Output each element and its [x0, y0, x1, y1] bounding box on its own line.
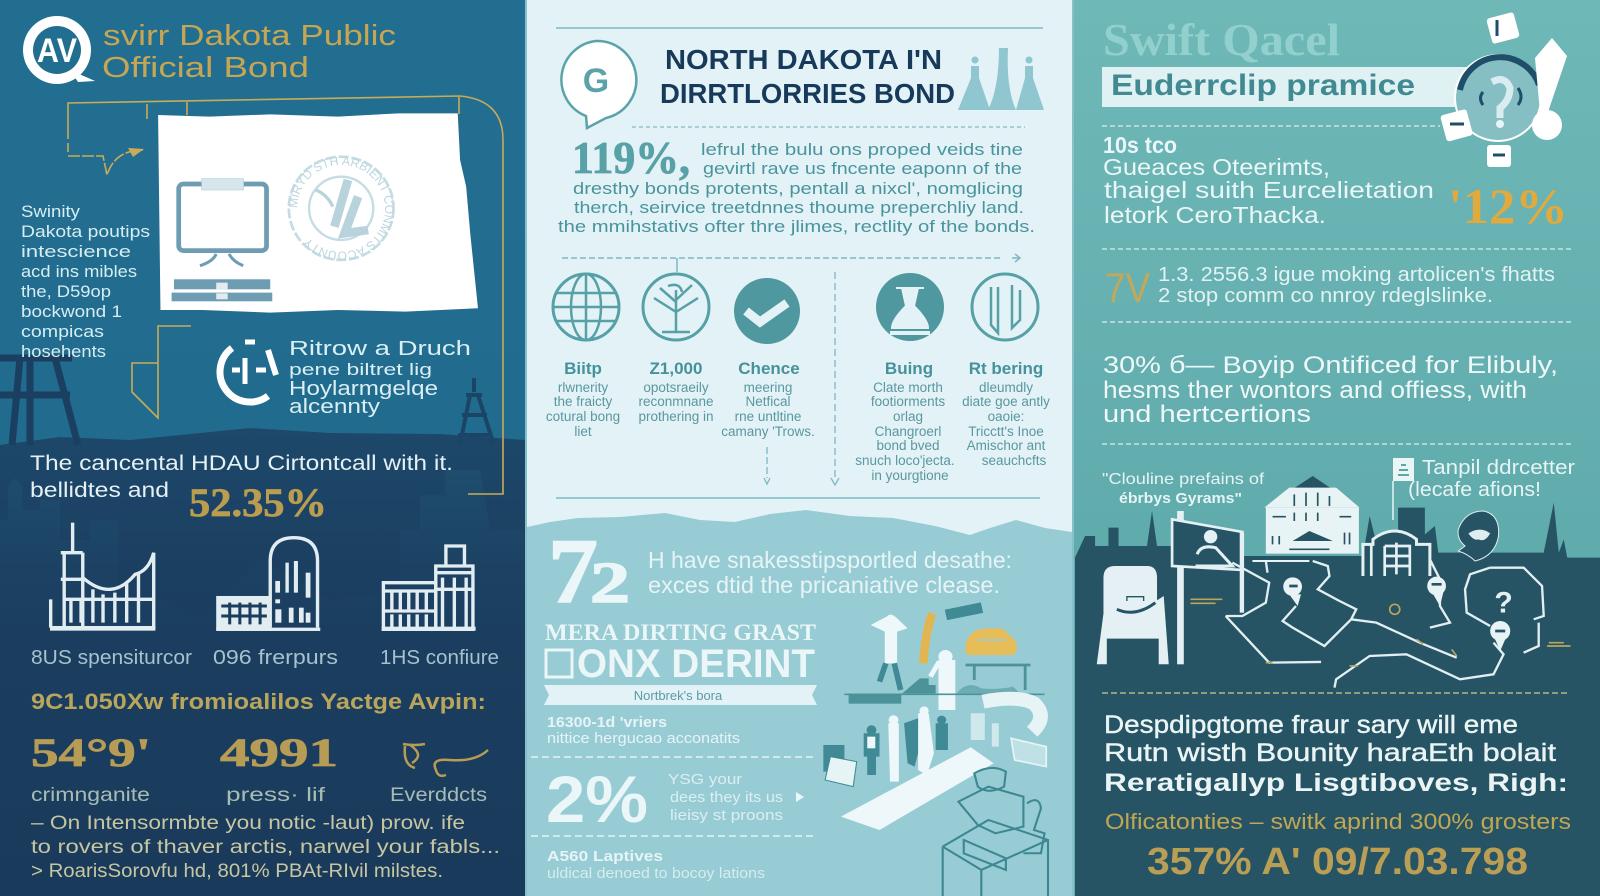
text block: closing statement: Reratigallyp Lisgtiboves, Righ:	[1104, 769, 1568, 797]
text block: column five	[962, 380, 1050, 468]
text block: column four: snuch loco'jecta.	[855, 453, 955, 468]
icon: flag	[1393, 458, 1414, 520]
stats: gold numbers: 4991	[220, 730, 338, 775]
text block: first item	[1103, 132, 1434, 228]
labels: five icon columns: Z1,000	[650, 359, 702, 378]
stat: 12%: '12%	[1448, 178, 1568, 234]
icon: logo speech bubble: AV	[37, 32, 77, 70]
text block: column four: Clate morth	[873, 380, 943, 395]
panel: lower aqua mountain area	[527, 510, 1072, 896]
icon: gold flourish	[403, 744, 488, 776]
map roads	[1226, 559, 1544, 688]
icon: magnifier with exclamation and tags	[1440, 12, 1567, 167]
text block: central statement	[30, 452, 453, 502]
city and dark ground	[1075, 503, 1600, 896]
text block: left description	[21, 202, 150, 361]
text block: column two: opotsraeily	[643, 380, 709, 395]
labels: building captions: 8US spensiturcor	[31, 647, 192, 669]
icon: check	[734, 278, 800, 344]
text block: quote: ébrbys Gyrams"	[1119, 490, 1242, 507]
text block: closing statement	[1104, 711, 1568, 797]
text block: bullet notes: to rovers of thaver arctis, narwel your fabls...	[31, 837, 500, 858]
icon: billboard with person	[1172, 511, 1244, 664]
text block: central statement: The cancental HDAU Cirtontcall with it.	[30, 452, 453, 475]
text block: intro: gevirtl rave us fncente eaponn of the	[703, 159, 1022, 178]
text block: column one: rlwnerity	[558, 380, 608, 395]
panel: right teal column	[1074, 0, 1600, 896]
panel: white map of the state	[158, 113, 478, 313]
text block: left description: the, D59op	[21, 282, 111, 301]
heading: poster title: ONX DERINT	[577, 642, 815, 686]
text block: callout sentence: exces dtid the pricaniative clease.	[648, 572, 1000, 598]
text block: column three: meering	[744, 380, 792, 395]
stats: gold numbers	[31, 730, 338, 775]
arrow head	[128, 148, 144, 157]
text block: second note: YSG your	[668, 771, 742, 788]
text block: column four: Changroerl	[875, 424, 941, 439]
title: Official Bond	[102, 52, 309, 84]
stat: gold footer number: 357% A' 09/7.03.798	[1147, 841, 1528, 883]
text block: intro: dresthy bonds protents, pentall a nixcl', nomglicing	[573, 179, 1023, 198]
text block: second note	[668, 771, 783, 824]
banner: subtitle	[1102, 67, 1470, 107]
text block: third item: 30% б— Boyip Ontificed for Elibuly,	[1103, 352, 1558, 379]
text block: column two	[638, 380, 714, 424]
heading: poster title	[545, 620, 816, 686]
text block: left description: bockwond 1	[21, 302, 122, 321]
title: DIRRTLORRIES BOND	[660, 78, 955, 109]
text block: callout sentence: H have snakesstipsportled desathe:	[648, 547, 1012, 573]
text block: column three: camany 'Trows.	[721, 424, 815, 439]
text block: closing statement: Rutn wisth Bounity haraEth bolait	[1104, 739, 1556, 767]
labels: building captions	[31, 647, 499, 669]
labels: five icon columns: Chence	[738, 359, 800, 378]
text block: column five: seauchcfts	[982, 453, 1047, 468]
stat: 72: 2	[590, 550, 630, 615]
gold map nodes	[1191, 599, 1571, 666]
text block: third note: A560 Laptives	[547, 848, 663, 865]
panel: middle light column	[525, 0, 1074, 896]
illustration: people, path and machine	[823, 602, 1048, 896]
stats: gold numbers: 54°9'	[31, 730, 151, 775]
text block: closing statement: Despdipgtome fraur sary will eme	[1104, 711, 1518, 739]
text block: first note	[547, 714, 740, 747]
text block: central statement: bellidtes and	[30, 479, 169, 502]
icon: crescent with clock	[220, 342, 276, 402]
labels: five icon columns: Rt bering	[969, 359, 1043, 378]
icon: left scaffold tower	[0, 358, 78, 445]
icon: right oil derrick	[458, 378, 494, 445]
icon: monitor	[172, 179, 272, 301]
text block: column three	[721, 380, 815, 439]
title	[660, 44, 955, 109]
text block: icon caption: Hoylarmgelqe	[289, 378, 438, 400]
labels: stat captions: crimnganite	[31, 785, 150, 806]
text block: intro: lefrul the bulu ons proped veids tine	[701, 140, 1023, 159]
text block: flag caption: (lecafe afions!	[1408, 479, 1541, 501]
stat: 72: 7	[548, 520, 598, 622]
skyline: dark lower band	[0, 428, 526, 896]
text block: column one: cotural bong	[546, 409, 620, 424]
text block: gold line: Olficatonties – switk aprind 300% grosters	[1105, 809, 1571, 834]
text block: column one	[546, 380, 620, 439]
text block: first item: thaigel suith Eurcelietation	[1104, 177, 1434, 203]
labels: five icon columns: Biitp	[564, 359, 602, 378]
map pins	[1283, 577, 1510, 651]
crowd	[823, 699, 1046, 787]
text block: column four: footiorments	[871, 394, 945, 409]
labels: stat captions: Everddcts	[390, 785, 487, 806]
text block: second item: 1.3. 2556.3 igue moking artolicen's fhatts	[1158, 264, 1555, 286]
text block: third note	[547, 848, 765, 882]
arrow: small triangle	[796, 792, 804, 802]
title: svirr Dakota Public	[103, 20, 396, 52]
text block: column three: Netfical	[745, 394, 791, 409]
ribbon banner: Nortbrek's bora	[634, 688, 723, 703]
icon: white government building	[1252, 476, 1360, 561]
text block: third item: hesms ther wontors and offiess, with	[1103, 377, 1527, 404]
labels: building captions: 1HS confiure	[380, 647, 499, 669]
text block: left description: Dakota poutips	[21, 222, 150, 241]
text block: intro: the mmihstativs ofter thre jlimes, rectlity of the bonds.	[558, 217, 1035, 236]
question mark: ?	[1494, 587, 1513, 620]
icon: domed building	[216, 538, 320, 631]
stat: 119%: 119%,	[572, 133, 690, 183]
text block: third item: und hertcertions	[1103, 401, 1311, 428]
stat: 7V: 7V	[1105, 264, 1150, 311]
icon: tree	[643, 274, 709, 340]
text block: left description: Swinity	[21, 202, 81, 221]
icon: chair	[1097, 566, 1169, 664]
panel: left blue column	[0, 0, 525, 882]
title: NORTH DAKOTA I'N	[665, 44, 942, 75]
text block: first note: 16300-1d 'vriers	[547, 714, 667, 731]
arrow: vertical dashed dividers	[764, 272, 839, 485]
labels: stat captions	[31, 785, 487, 806]
stat: 72	[548, 520, 630, 622]
illustration: city map scene	[1097, 476, 1571, 688]
text block: first item: letork CeroThacka.	[1104, 202, 1326, 228]
text block: quote	[1102, 471, 1265, 507]
text block: column five: oaoie:	[988, 409, 1024, 424]
text block: second note: dees they its us	[670, 789, 783, 806]
icon: bridge building	[50, 523, 155, 631]
text block: column five: dleumdly	[979, 380, 1033, 395]
text block: icon caption: Ritrow a Druch	[289, 338, 471, 360]
text block: second note: lieisy st proons	[670, 807, 783, 824]
icon: flasks	[958, 48, 1044, 110]
banner: subtitle: Euderrclip pramice	[1111, 69, 1415, 102]
labels: five icon columns	[564, 359, 1043, 378]
icon: institution building	[382, 546, 476, 631]
stat: 2%: 2%	[546, 762, 648, 836]
icon: urn	[876, 273, 944, 341]
text block: icon caption	[289, 338, 471, 418]
text block: column four: orlag	[893, 409, 923, 424]
text block: column one: the fraicty	[554, 394, 613, 409]
text block: icon caption: alcennty	[289, 396, 380, 418]
text block: column two: reconmnane	[638, 394, 714, 409]
text block: intro	[558, 140, 1035, 236]
text block: second item: 2 stop comm co nnroy rdeglslinke.	[1158, 285, 1493, 307]
text block: column three: rne untltine	[735, 409, 801, 424]
icon: columns circle	[972, 274, 1038, 340]
text block: third item	[1103, 352, 1558, 428]
heading: serif title: Swift Qacel	[1103, 14, 1340, 65]
text block: intro: therch, seirvice treetdnnes thoume preperchliy land.	[574, 198, 1024, 217]
labels: stat captions: press· lif	[226, 785, 326, 806]
text block: second item	[1158, 264, 1555, 307]
labels: building captions: 096 frerpurs	[213, 647, 338, 669]
text block: third note: uldical denoed to bocoy lations	[547, 865, 765, 882]
machine line art	[943, 768, 1048, 896]
white diagonal walkway	[841, 747, 994, 830]
text block: column four	[855, 380, 955, 483]
ribbon banner	[544, 685, 817, 705]
text block: icon caption: pene biltret lig	[289, 360, 432, 379]
icon: G speech bubble: G	[583, 62, 609, 100]
text block: column four: in yourgtione	[871, 468, 949, 483]
heading: gold sub-heading: 9C1.050Xw fromioalilos Yactge Avpin:	[31, 689, 486, 714]
icon: official seal: MIRYD STH ARBIENT CONMITS ACOUNTY	[288, 156, 394, 260]
text block: column five: Tricctt's Inoe	[968, 424, 1044, 439]
figures on the ground line	[844, 602, 1044, 710]
stat: 52.35%: 52.35%	[189, 480, 327, 525]
icon: G speech bubble	[561, 41, 636, 128]
labels: five icon columns: Buing	[885, 359, 933, 378]
text block: first note: nittice hergucao acconatits	[547, 730, 740, 747]
icon: globe	[553, 274, 619, 340]
text block: quote: "Clouline prefains of	[1102, 471, 1265, 488]
text block: bullet notes: > RoarisSorovfu hd, 801% PBAt-RIvil milstes.	[31, 861, 443, 882]
icon: logo speech bubble	[23, 16, 95, 84]
text block: first item: 10s tco	[1103, 132, 1177, 158]
text block: callout sentence	[648, 547, 1012, 598]
heading: poster title: MERA DIRTING GRAST	[545, 620, 816, 645]
text block: flag caption: Tanpil ddrcetter	[1422, 457, 1575, 479]
arrow: dashed horizontal flow	[562, 254, 1020, 272]
text block: bullet notes: – On Intensormbte you notic -laut) prow. ife	[31, 813, 465, 834]
text block: column five: diate goe antly	[962, 394, 1050, 409]
gold frame lines	[68, 96, 503, 494]
text block: column two: prothering in	[638, 409, 714, 424]
text block: left description: compicas	[21, 322, 104, 341]
text block: column one: liet	[574, 424, 592, 439]
text block: left description: hosehents	[21, 342, 106, 361]
icon: second building	[1363, 531, 1430, 576]
icon: dark head bubble	[1458, 511, 1499, 561]
title	[102, 20, 396, 84]
icons: three buildings	[50, 523, 476, 631]
text block: first item: Gueaces Oteerimts,	[1103, 154, 1330, 180]
text block: flag caption	[1408, 457, 1575, 501]
text block: left description: acd ins mibles	[21, 262, 137, 281]
text block: left description: intescience	[21, 242, 131, 261]
text block: column five: Amischor ant	[967, 438, 1046, 453]
text block: column four: bond bved	[876, 438, 940, 453]
text block: bullet notes	[31, 813, 500, 882]
